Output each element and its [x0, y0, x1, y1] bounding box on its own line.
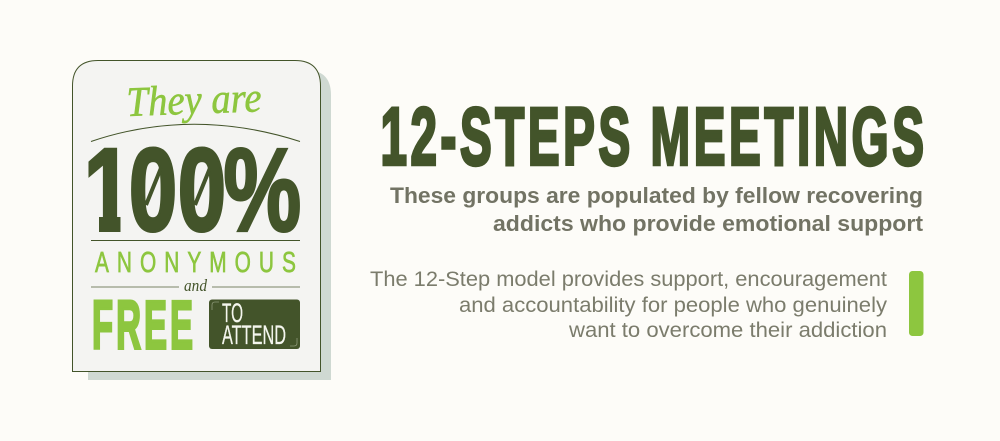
- script heading: They are: They are: [126, 75, 262, 126]
- body text: want to overcome their addiction: [568, 319, 887, 342]
- body text: [370, 268, 888, 342]
- curved divider: [91, 124, 300, 142]
- word: FREE: FREE: [92, 287, 193, 364]
- green accent bar: [909, 271, 924, 336]
- label: TO ATTEND: [209, 298, 300, 350]
- divider left of and: [91, 286, 179, 288]
- body text: and accountability for people who genuinely: [459, 294, 888, 317]
- subheading: addicts who provide emotional support: [493, 211, 924, 236]
- divider right of and: [212, 286, 300, 288]
- body text: The 12-Step model provides support, encouragement: [370, 268, 887, 291]
- script word: and: and: [184, 276, 207, 295]
- label background: [209, 300, 300, 349]
- subheading: [390, 183, 924, 236]
- card shadow: [88, 70, 331, 380]
- label corner marks: [212, 302, 297, 346]
- title: 12-STEPS MEETINGS: [380, 91, 924, 183]
- label text: ATTEND: ATTEND: [222, 320, 286, 350]
- panel: badge card: [72, 60, 320, 372]
- subheading: These groups are populated by fellow recovering: [390, 183, 923, 208]
- divider above anonymous: [91, 240, 300, 242]
- big figure: 100%: 100%: [84, 124, 301, 256]
- word: ANONYMOUS: ANONYMOUS: [95, 247, 296, 279]
- card background: [72, 60, 320, 372]
- label text: TO: TO: [222, 298, 243, 328]
